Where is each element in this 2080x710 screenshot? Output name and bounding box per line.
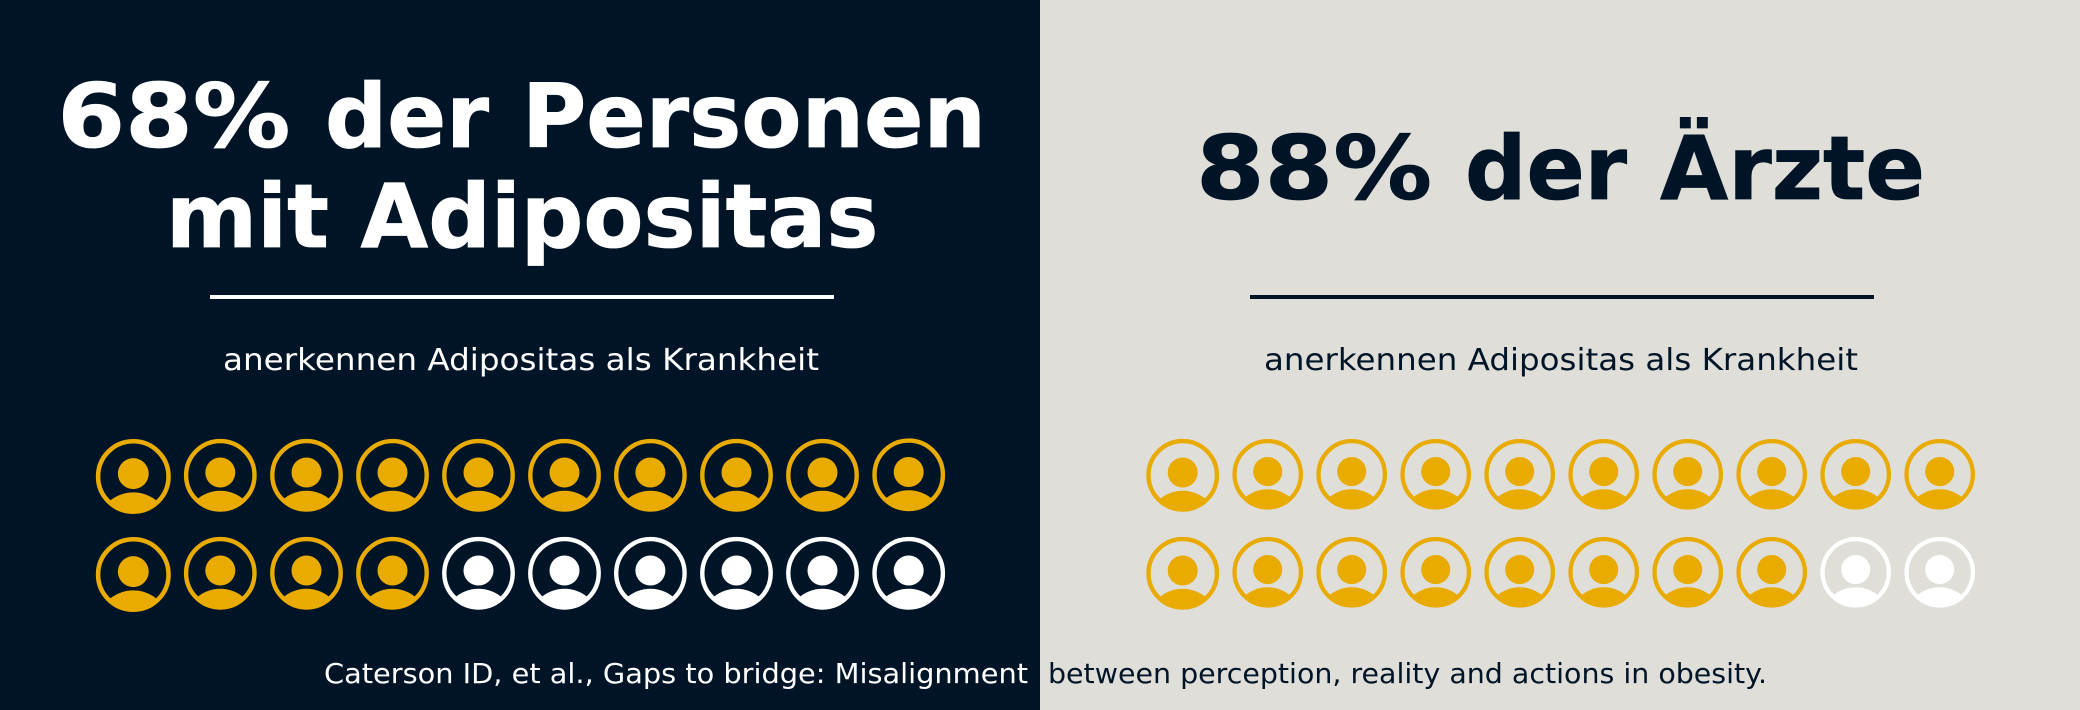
text: physicians subtitle: anerkennen Adipositas als Krankheit (1264, 343, 1858, 378)
heading: patients: Personen (522, 65, 986, 168)
heading: physicians: 88% (1196, 117, 1432, 220)
heading: patients: der (325, 65, 490, 168)
icon grid: physicians 88 percent (1148, 441, 1973, 609)
text: patients subtitle: anerkennen Adipositas als Krankheit (223, 343, 819, 378)
heading: physicians: der (1465, 117, 1628, 220)
footer: citation: Caterson ID, et al., Gaps to bridge: Misalignment (324, 658, 1028, 690)
heading: patients: 68% (57, 65, 290, 168)
icon grid: patients 68 percent (98, 441, 943, 611)
footer: citation (324, 658, 1767, 690)
heading: patients (57, 65, 986, 268)
rule: physicians (1250, 295, 1874, 299)
heading: patients: Adipositas (360, 165, 878, 268)
rule: patients (210, 295, 834, 299)
heading: patients: mit (166, 165, 329, 268)
footer: citation: between perception, reality and actions in obesity. (1048, 658, 1767, 690)
panel: physicians background (1040, 0, 2080, 710)
panel: patients background (0, 0, 1040, 710)
heading: physicians (1196, 117, 1925, 220)
heading: physicians: Ärzte (1660, 117, 1925, 220)
